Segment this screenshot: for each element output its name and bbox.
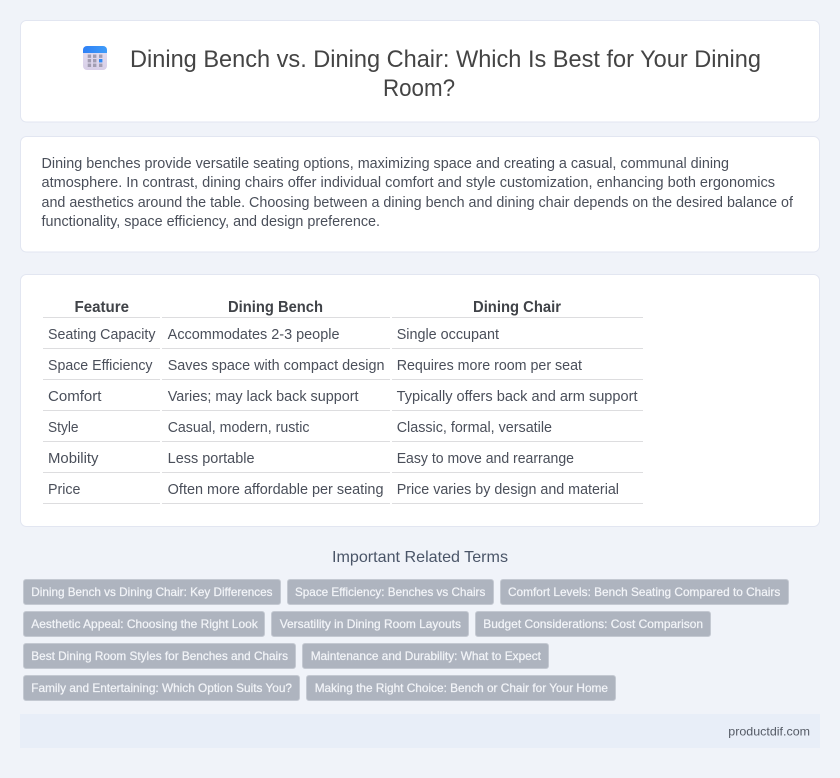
row: style: Classic, formal, versatile	[397, 420, 552, 436]
row: seating capacity: Seating Capacity	[48, 327, 156, 343]
heading: important related terms: Important Related Terms	[332, 549, 508, 566]
row: space efficiency	[48, 358, 582, 374]
table header	[74, 299, 561, 316]
tag	[24, 644, 296, 668]
table header: Dining Chair	[473, 299, 561, 316]
tag: Aesthetic Appeal: Choosing the Right Look	[31, 617, 259, 631]
row: style: Style	[48, 420, 78, 436]
panel: introduction	[20, 136, 820, 252]
title: Room?	[383, 75, 455, 102]
row: comfort: Typically offers back and arm support	[397, 389, 638, 405]
panel: comparison table	[20, 274, 820, 526]
row: space efficiency: Space Efficiency	[48, 358, 153, 374]
tag: Family and Entertaining: Which Option Suits You?	[31, 681, 292, 695]
tag	[24, 580, 280, 604]
row: space efficiency: Saves space with compact design	[168, 358, 384, 374]
tag: Making the Right Choice: Bench or Chair for Your Home	[315, 681, 608, 695]
tag	[24, 676, 300, 700]
row: price: Price	[48, 482, 80, 498]
row: comfort: Comfort	[48, 389, 102, 405]
tag: Best Dining Room Styles for Benches and Chairs	[31, 649, 288, 663]
row: mobility: Less portable	[168, 451, 254, 467]
tag	[272, 612, 468, 636]
related term tags	[24, 580, 788, 700]
row: price: Price varies by design and material	[397, 482, 619, 498]
intro text block: atmosphere. In contrast, dining chairs offer individual comfort and style customization, enhancing both ergonomics	[42, 175, 775, 191]
tag: Dining Bench vs Dining Chair: Key Differences	[31, 585, 272, 599]
tag	[500, 580, 788, 604]
intro text block: and aesthetics around the table. Choosing between a dining bench and dining chair depends on the desired balance of	[42, 195, 794, 211]
tag	[288, 580, 494, 604]
intro text block: functionality, space efficiency, and design preference.	[42, 214, 380, 230]
row: mobility: Mobility	[48, 451, 99, 467]
row: price	[48, 482, 619, 498]
tag	[24, 612, 264, 636]
row: comfort	[48, 389, 638, 405]
row: mobility	[48, 451, 574, 467]
footer: productdif.com	[728, 724, 810, 738]
panel: header	[20, 20, 820, 122]
tag	[302, 644, 548, 668]
tag: Maintenance and Durability: What to Expect	[311, 649, 542, 663]
tag: Versatility in Dining Room Layouts	[280, 617, 461, 631]
row: style	[48, 420, 552, 436]
tag	[476, 612, 710, 636]
tag: Comfort Levels: Bench Seating Compared to Chairs	[508, 585, 780, 599]
table header: Feature	[74, 299, 129, 316]
row: comfort: Varies; may lack back support	[168, 389, 358, 405]
footer	[20, 714, 820, 748]
row: seating capacity: Single occupant	[397, 327, 499, 343]
title	[130, 46, 761, 102]
intro text block: Dining benches provide versatile seating options, maximizing space and creating a casual, communal dining	[42, 156, 729, 172]
row: seating capacity	[48, 327, 499, 343]
row: seating capacity: Accommodates 2-3 people	[168, 327, 340, 343]
tag: Budget Considerations: Cost Comparison	[483, 617, 703, 631]
title: Dining Bench vs. Dining Chair: Which Is Best for Your Dining	[130, 46, 761, 73]
row: mobility: Easy to move and rearrange	[397, 451, 574, 467]
table header: Dining Bench	[228, 299, 323, 316]
row: style: Casual, modern, rustic	[168, 420, 310, 436]
row: space efficiency: Requires more room per seat	[397, 358, 582, 374]
icon: calendar	[83, 46, 107, 70]
intro text block	[42, 156, 794, 230]
tag: Space Efficiency: Benches vs Chairs	[295, 585, 485, 599]
tag	[306, 676, 616, 700]
row: price: Often more affordable per seating	[168, 482, 384, 498]
